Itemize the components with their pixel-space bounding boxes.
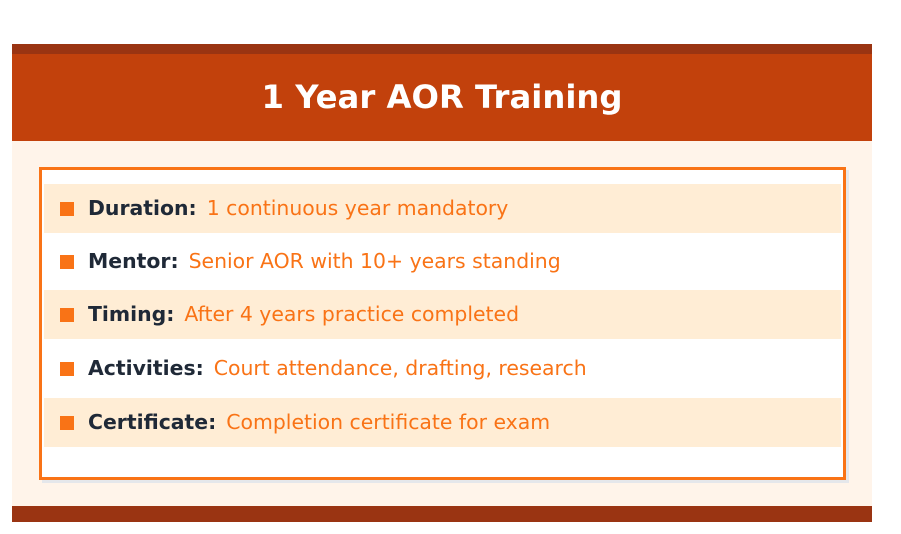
- row: timing: After 4 years practice completed: [184, 302, 519, 326]
- row: duration: [44, 184, 841, 233]
- row: certificate: Completion certificate for exam: [226, 410, 550, 434]
- header: [12, 54, 872, 141]
- top strip: [12, 44, 872, 54]
- row: activities: Activities:: [88, 356, 204, 380]
- row: duration: Duration:: [88, 196, 197, 220]
- row: timing: [44, 290, 841, 339]
- row: activities: Court attendance, drafting, research: [214, 356, 587, 380]
- bottom strip: [12, 506, 872, 522]
- row: mentor: Senior AOR with 10+ years standing: [189, 248, 561, 272]
- row: certificate: Certificate:: [88, 410, 216, 434]
- header: 1 Year AOR Training: [261, 78, 623, 116]
- row: mentor: Mentor:: [88, 248, 179, 272]
- row: duration: 1 continuous year mandatory: [207, 196, 508, 220]
- panel: details box: [39, 167, 846, 480]
- row: timing: Timing:: [88, 302, 174, 326]
- row: certificate: [44, 398, 841, 447]
